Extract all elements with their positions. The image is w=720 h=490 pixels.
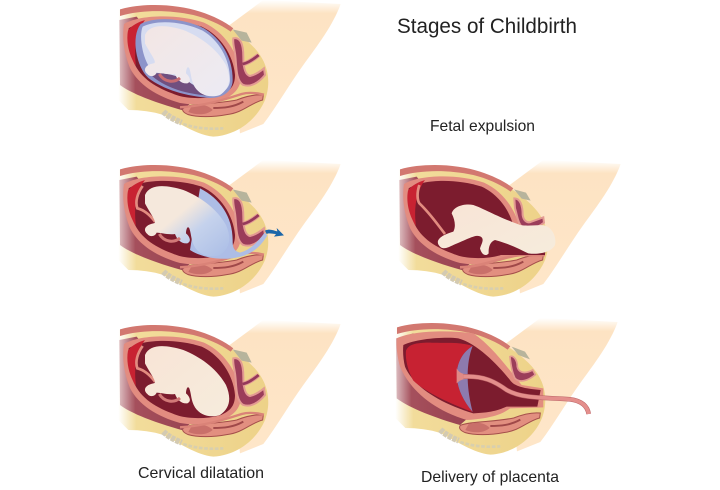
uterine cavity xyxy=(403,338,541,413)
panel: cervical dilatation xyxy=(118,320,341,457)
umbilical cord xyxy=(159,74,180,81)
panel: fetal expulsion xyxy=(398,160,621,297)
fetus xyxy=(145,346,229,416)
panel: second stage, water breaking xyxy=(118,160,341,297)
sac shadow xyxy=(150,73,215,96)
pelvis structure xyxy=(510,347,535,381)
fetus xyxy=(438,205,555,255)
arrow xyxy=(265,228,284,237)
fetus xyxy=(145,186,229,256)
umbilical cord xyxy=(159,234,180,241)
uterine septum xyxy=(136,186,155,222)
uterine wall xyxy=(396,331,543,420)
label: cervical dilatation: Cervical dilatation xyxy=(138,465,264,482)
umbilical cord xyxy=(159,394,180,401)
title: Stages of Childbirth xyxy=(397,15,577,38)
membranes xyxy=(457,346,473,412)
umbilical cord xyxy=(457,368,589,414)
panel: delivery of placenta xyxy=(395,318,618,455)
pelvis structure xyxy=(460,189,545,267)
amniotic fluid xyxy=(141,22,230,95)
label: delivery of placenta: Delivery of placenta xyxy=(421,469,559,486)
uterine back wall xyxy=(396,333,473,425)
amniotic sac xyxy=(135,19,233,98)
uterine septum xyxy=(136,346,155,382)
cavity lower extension xyxy=(480,210,547,255)
fluid xyxy=(190,188,267,259)
uterine body xyxy=(396,331,589,425)
panel: first stage, intact sac xyxy=(118,0,341,137)
label: fetal expulsion: Fetal expulsion xyxy=(430,118,535,135)
placenta septum xyxy=(418,185,445,234)
placenta surface xyxy=(406,343,473,412)
fetus xyxy=(145,26,229,96)
